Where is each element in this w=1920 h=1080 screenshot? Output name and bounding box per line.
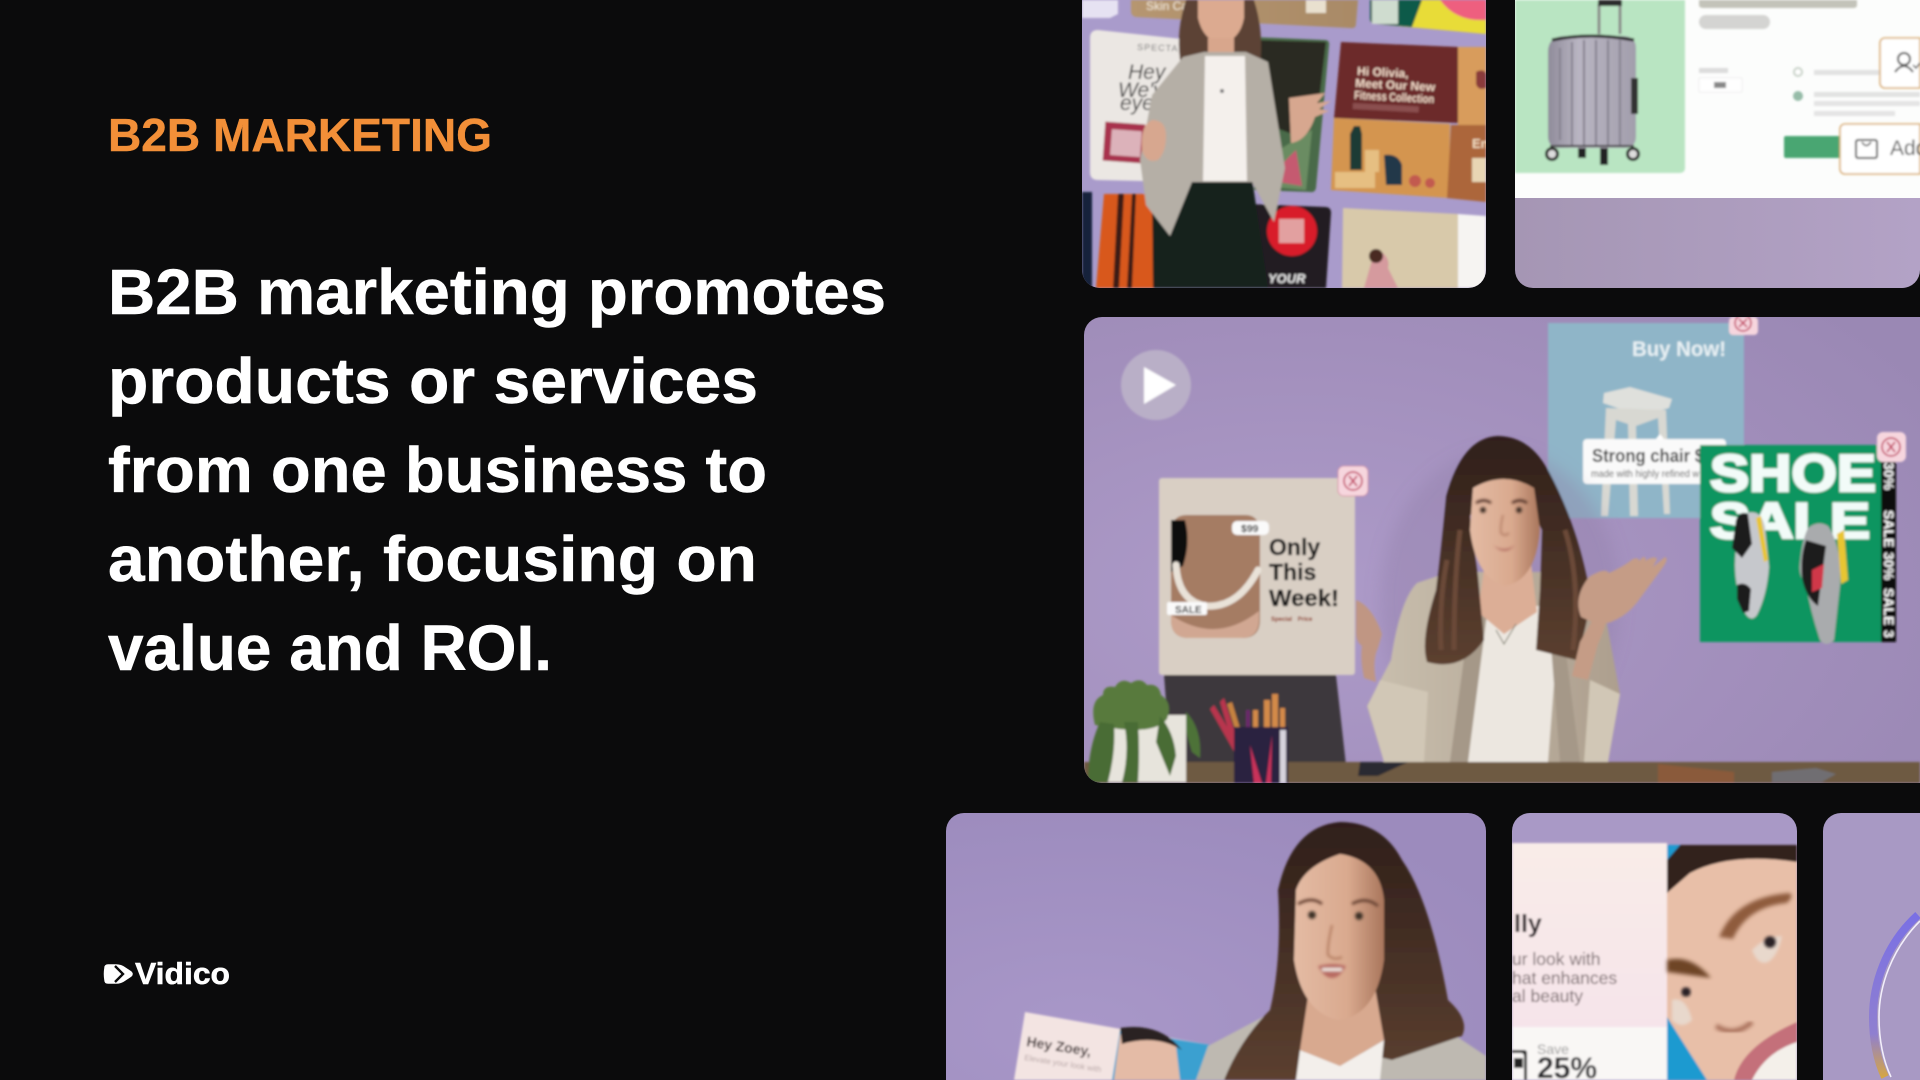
ad: shoe sale	[1700, 445, 1897, 644]
ad: Only This Week: SALE	[1175, 605, 1202, 616]
panel: purple product circle	[1823, 813, 1920, 1080]
ad: stool Buy Now: Buy Now!	[1632, 338, 1726, 361]
photo: curly hair	[1254, 37, 1329, 192]
ad: Only This Week: $99	[1241, 523, 1259, 535]
presenter	[1140, 0, 1331, 288]
ad: stool Buy Now	[1548, 323, 1744, 518]
card: brown with text: En	[1472, 136, 1489, 151]
main statement text	[108, 256, 886, 684]
presenter	[1196, 822, 1486, 1080]
panel: main video presenter with floating ads	[1084, 315, 1920, 783]
card: orange stripes	[1082, 192, 1156, 288]
ad: shoe sale: 30%	[1881, 462, 1897, 491]
card: Skin Care	[1131, 0, 1358, 28]
postcard: Hey Zoey	[1014, 1012, 1211, 1080]
postcard: Hey Zoey: Elevate your look with	[1024, 1053, 1102, 1074]
card: Spectacle: eyes	[1120, 92, 1165, 115]
card: black with red QR: YOUR	[1268, 271, 1306, 286]
ad: shoe sale: SALE	[1881, 588, 1897, 625]
card: brown with text	[1447, 125, 1489, 202]
desk	[1084, 762, 1920, 783]
monitor back	[1164, 675, 1348, 783]
card: Hi Olivia: Hi Olivia,	[1357, 64, 1409, 81]
card: Spectacle: SPECTAC	[1137, 42, 1186, 54]
card: Spectacle: Hey	[1128, 61, 1167, 84]
main statement text: another, focusing on	[108, 523, 757, 595]
close badge: shoe ad	[1877, 432, 1906, 462]
ad: Only This Week	[1159, 478, 1355, 675]
floating user badge	[1880, 38, 1920, 88]
panel: beauty ad with save offer	[1512, 813, 1797, 1080]
ring graphic	[1873, 915, 1920, 1077]
photo: beige room	[1342, 208, 1486, 288]
pen cup	[1210, 694, 1288, 783]
ad copy column: ur look with	[1512, 949, 1601, 969]
card: Spectacle	[1088, 28, 1182, 182]
ad: shoe sale: 30%	[1881, 552, 1897, 581]
card: black with red QR	[1254, 202, 1333, 288]
card: Spectacle: We've	[1118, 79, 1175, 102]
option list	[1793, 68, 1920, 116]
product photo: suitcase	[1515, 0, 1685, 173]
logo: Vidico: Vidico	[135, 956, 230, 991]
corner card	[1082, 0, 1118, 18]
postcard: Hey Zoey: Hey Zoey,	[1026, 1033, 1092, 1059]
card: orange right	[1458, 47, 1486, 125]
ad copy column	[1512, 843, 1667, 1080]
card: Hi Olivia: Fitness Collection	[1354, 88, 1434, 106]
main statement text: products or services	[108, 345, 758, 417]
ad: shoe sale: 3	[1881, 630, 1897, 638]
presenter	[1356, 436, 1667, 762]
ad copy column: hat enhances	[1512, 968, 1617, 988]
product label: Strong chair: Strong chair $	[1592, 446, 1704, 466]
main statement text: B2B marketing promotes	[108, 256, 886, 328]
ad copy column: Save	[1537, 1041, 1569, 1057]
ad copy column: lly	[1514, 910, 1542, 938]
photo: bottle and weights	[1331, 118, 1450, 198]
eyebrow heading: B2B MARKETING: B2B MARKETING	[108, 109, 492, 161]
ad: shoe sale: SALE	[1710, 493, 1870, 549]
product label: Strong chair: made with highly refined w	[1591, 468, 1699, 480]
panel: presenter with postcards wall	[1082, 0, 1489, 288]
ad: Only This Week: Special Price	[1271, 617, 1313, 623]
quantity field	[1698, 67, 1729, 90]
ad copy column: al beauty	[1512, 986, 1583, 1006]
card: green and yellow	[1370, 0, 1486, 34]
ad: Only This Week: Week!	[1269, 585, 1339, 611]
main statement text: from one business to	[108, 434, 767, 506]
photo: smiling woman	[1667, 845, 1797, 1080]
title placeholder bars	[1699, 0, 1857, 29]
close badge: Only This Week ad	[1338, 466, 1368, 496]
card: Hi Olivia	[1334, 42, 1458, 123]
ad: shoe sale: SALE	[1881, 510, 1897, 547]
product label: Strong chair	[1583, 434, 1726, 484]
play button	[1121, 350, 1191, 420]
ad: Only This Week: Only	[1269, 534, 1320, 560]
panel: checkout interface with suitcase	[1515, 0, 1920, 288]
panel: presenter close-up holding postcard	[946, 813, 1486, 1080]
floating add button	[1840, 124, 1920, 174]
buy button	[1784, 136, 1844, 158]
close badge: stool ad	[1729, 315, 1758, 335]
card: Hi Olivia: Meet Our New	[1355, 76, 1436, 94]
main statement text: value and ROI.	[108, 612, 552, 684]
ad: Only This Week: This	[1269, 559, 1316, 585]
ad: shoe sale: SHOE	[1710, 445, 1876, 503]
plant in white pot	[1088, 680, 1200, 782]
